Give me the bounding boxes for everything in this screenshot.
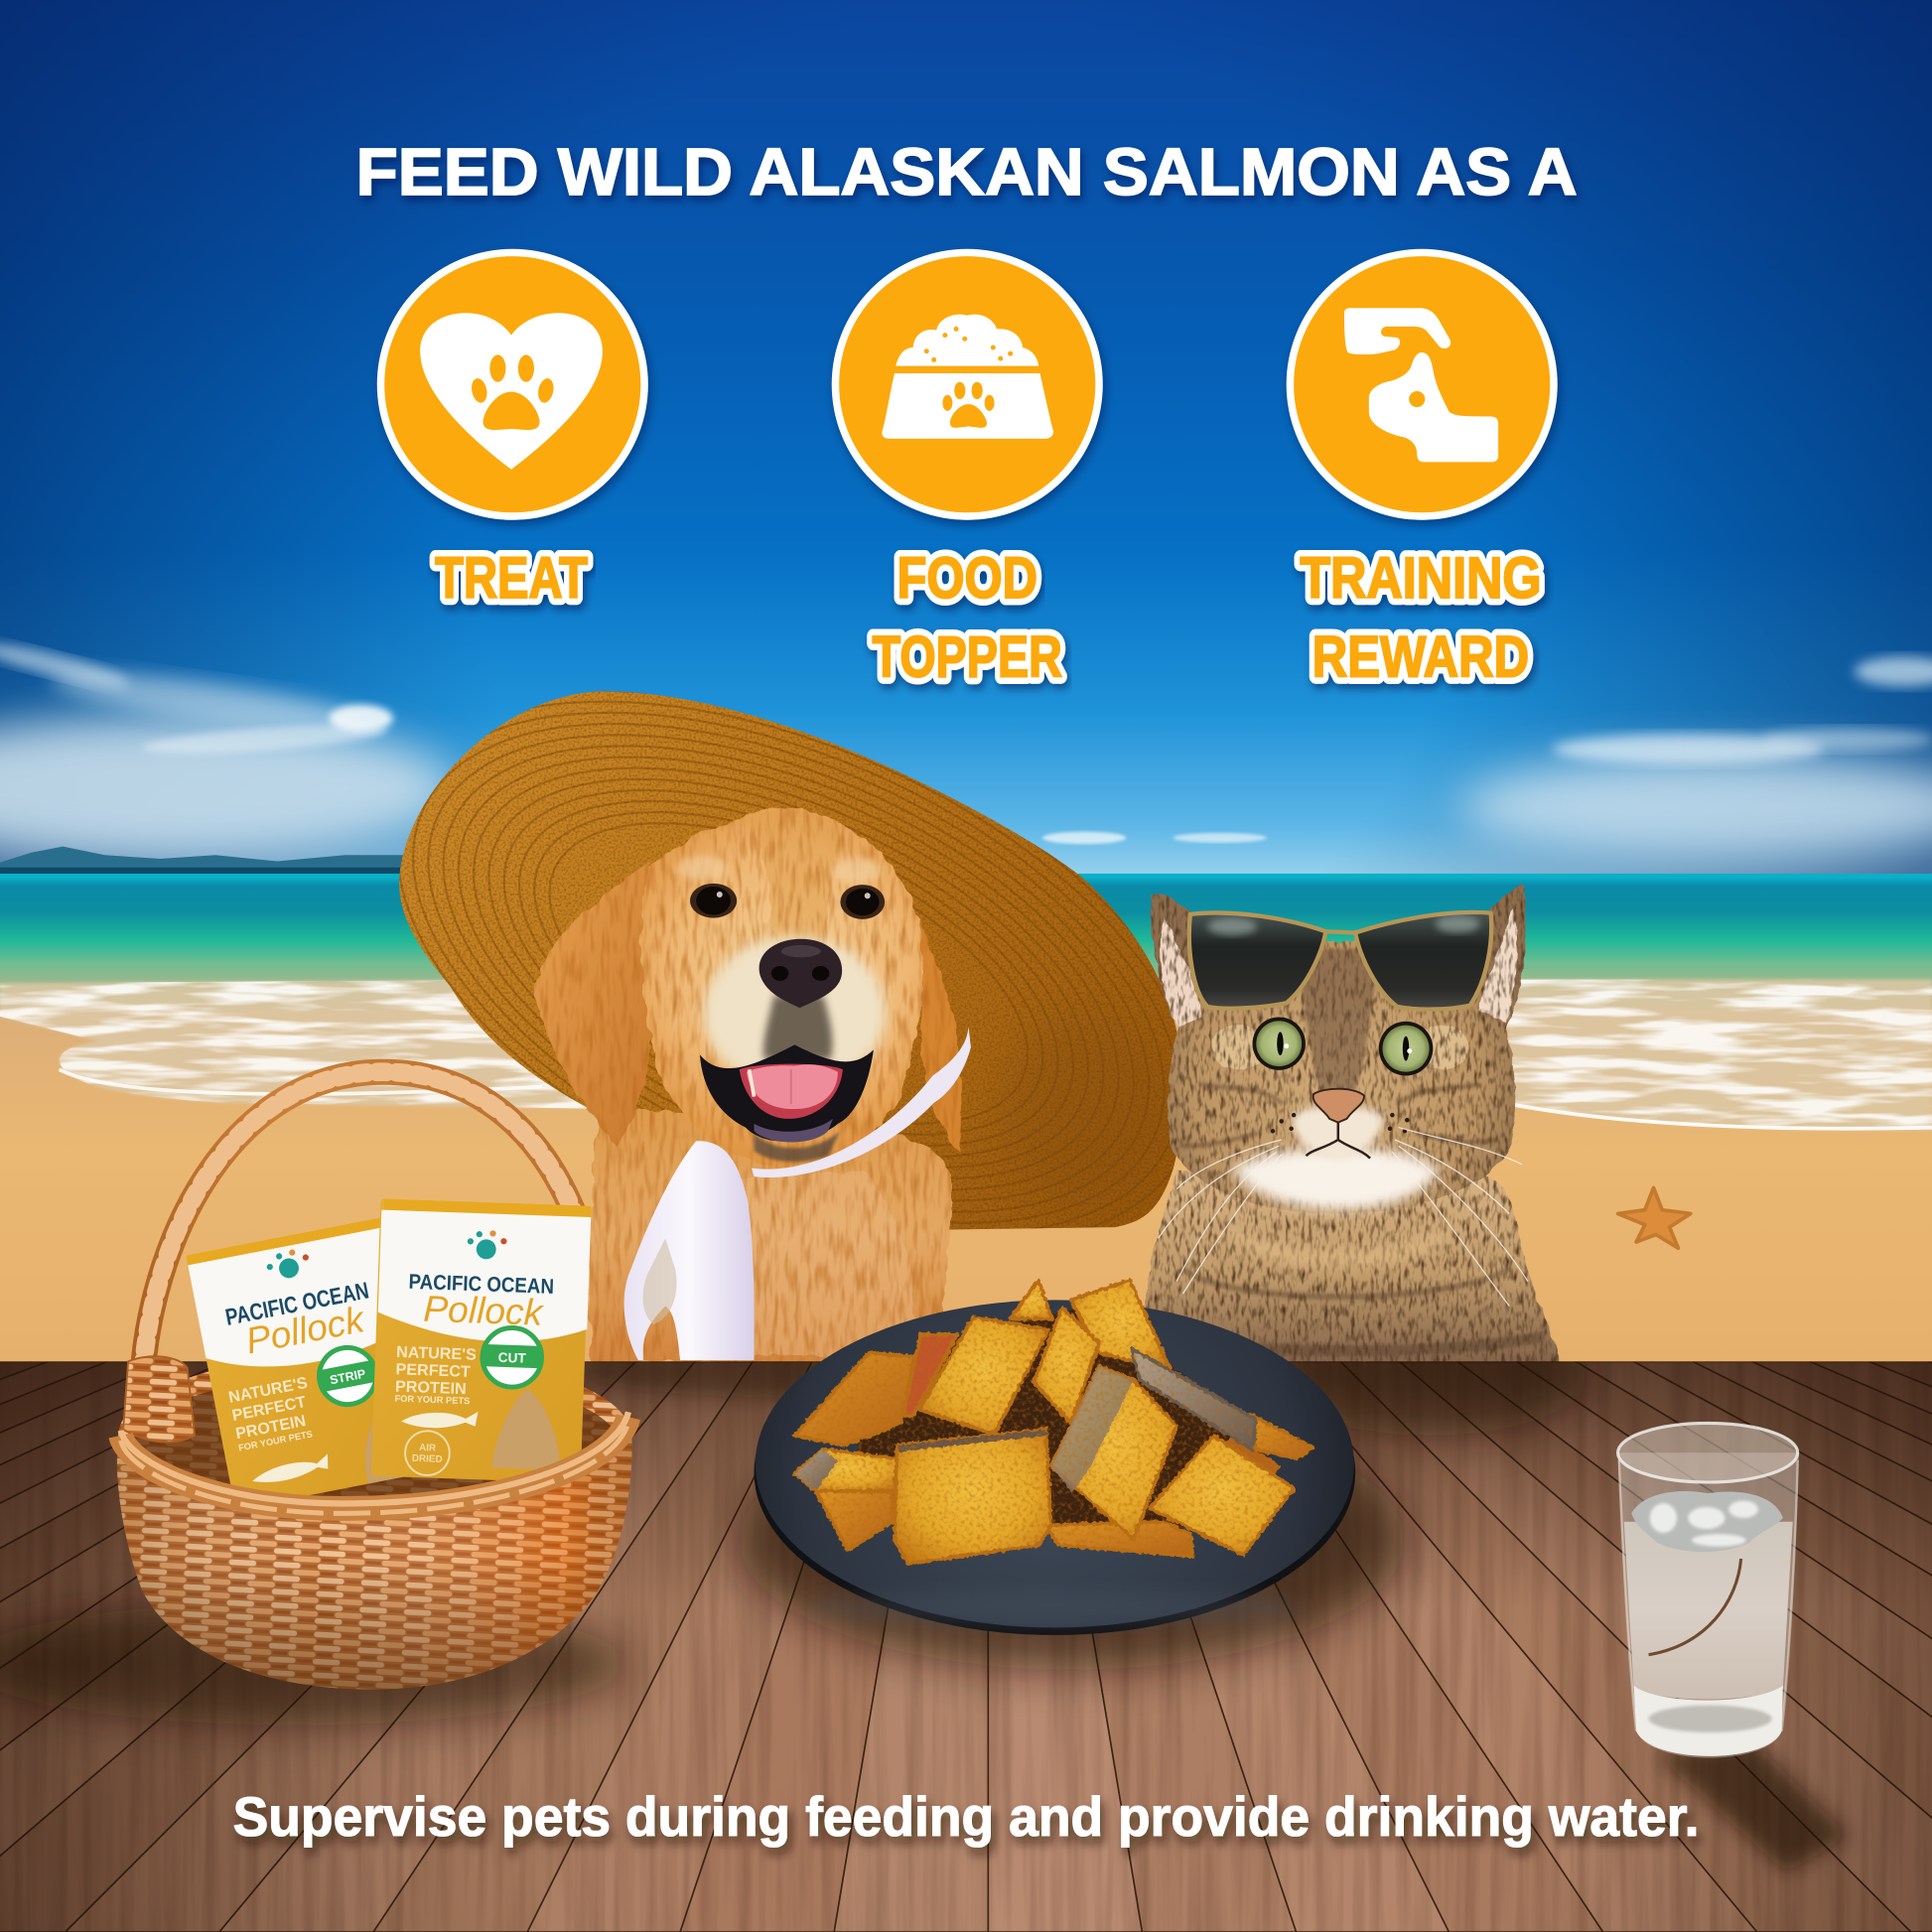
basket handle xyxy=(123,1072,574,1443)
dog eyes xyxy=(690,884,885,919)
dog wearing a straw hat xyxy=(399,691,1177,1362)
cat nose and mouth xyxy=(1271,1089,1410,1159)
icon: heart with paw xyxy=(380,252,644,516)
deck planks xyxy=(0,1361,1932,1932)
black plate of salmon treats xyxy=(755,1280,1355,1635)
cat with sunglasses xyxy=(1144,884,1561,1363)
distant hills xyxy=(0,847,413,878)
sea xyxy=(0,874,1932,1017)
left product pouch: NATURE'S xyxy=(227,1374,309,1407)
right product pouch: PACIFIC OCEAN xyxy=(408,1271,554,1299)
dog open mouth and tongue xyxy=(700,1044,874,1162)
cat white chin xyxy=(1226,1106,1453,1268)
cat eyes xyxy=(1253,1018,1433,1075)
right product pouch: AIR xyxy=(419,1443,436,1453)
right product pouch: Pollock xyxy=(423,1288,545,1333)
starfish xyxy=(1618,1187,1691,1248)
glass body xyxy=(1618,1452,1799,1758)
clouds xyxy=(0,636,1932,860)
right product pouch: NATURE'S xyxy=(396,1343,477,1364)
background: sky xyxy=(0,0,1932,888)
title: FEED WILD ALASKAN SALMON AS A xyxy=(356,135,1578,209)
cat whiskers xyxy=(1159,1128,1528,1307)
wooden deck table xyxy=(0,1361,1932,1932)
dog muzzle xyxy=(678,857,886,1089)
label: topper: TOPPER xyxy=(873,624,1062,689)
left product pouch: PACIFIC OCEAN xyxy=(223,1277,371,1330)
straw hat xyxy=(399,691,1177,1229)
right product pouch: DRIED xyxy=(412,1453,443,1465)
right product pouch xyxy=(371,1198,592,1483)
left product pouch: PERFECT xyxy=(230,1393,308,1425)
basket front weave xyxy=(117,1439,631,1690)
left product pouch: FOR YOUR PETS xyxy=(237,1429,314,1453)
glass of water xyxy=(1618,1423,1799,1758)
thick glass base xyxy=(1634,1686,1783,1756)
left product pouch xyxy=(186,1217,433,1509)
sunglasses xyxy=(1189,912,1491,1010)
icon: hand petting dog xyxy=(1290,252,1554,516)
surf foam xyxy=(0,980,1932,1130)
footer note: Supervise pets during feeding and provide drinking water. xyxy=(233,1785,1699,1848)
left product pouch: Pollock xyxy=(242,1298,369,1362)
right product pouch: PROTEIN xyxy=(395,1378,467,1398)
right product pouch: CUT xyxy=(497,1350,527,1366)
label: training: TRAINING xyxy=(1300,546,1542,611)
label: topper: TOPPER xyxy=(873,624,1062,689)
dog body and head fur xyxy=(533,808,963,1363)
right product pouch: PERFECT xyxy=(395,1360,471,1381)
basket inside xyxy=(118,1351,630,1519)
glass rim xyxy=(1618,1423,1798,1482)
water surface ripple xyxy=(1631,1491,1783,1552)
icon: food bowl xyxy=(835,252,1099,516)
basket rim xyxy=(121,1412,628,1513)
reflected plank line xyxy=(1649,1559,1741,1655)
right product pouch: FOR YOUR PETS xyxy=(394,1394,470,1406)
treats pile xyxy=(794,1280,1313,1564)
label: training: TRAINING xyxy=(1300,546,1542,611)
dog nose xyxy=(759,939,842,1008)
label: food: FOOD xyxy=(897,546,1037,611)
label: food: FOOD xyxy=(897,546,1037,611)
deck shadows xyxy=(0,1312,1849,1872)
label: treat: TREAT xyxy=(435,546,588,611)
left product pouch: PROTEIN xyxy=(234,1412,308,1443)
wicker basket with product pouches xyxy=(111,1072,640,1694)
left product pouch: STRIP xyxy=(329,1367,367,1387)
white ribbon xyxy=(624,1027,971,1360)
cat tabby markings xyxy=(1159,949,1540,1351)
plate xyxy=(755,1300,1355,1635)
label: treat: TREAT xyxy=(435,546,588,611)
label: reward: REWARD xyxy=(1312,624,1529,689)
cat fur xyxy=(1144,884,1561,1363)
water xyxy=(1624,1522,1793,1699)
beach sand xyxy=(0,1011,1932,1368)
label: reward: REWARD xyxy=(1312,624,1529,689)
